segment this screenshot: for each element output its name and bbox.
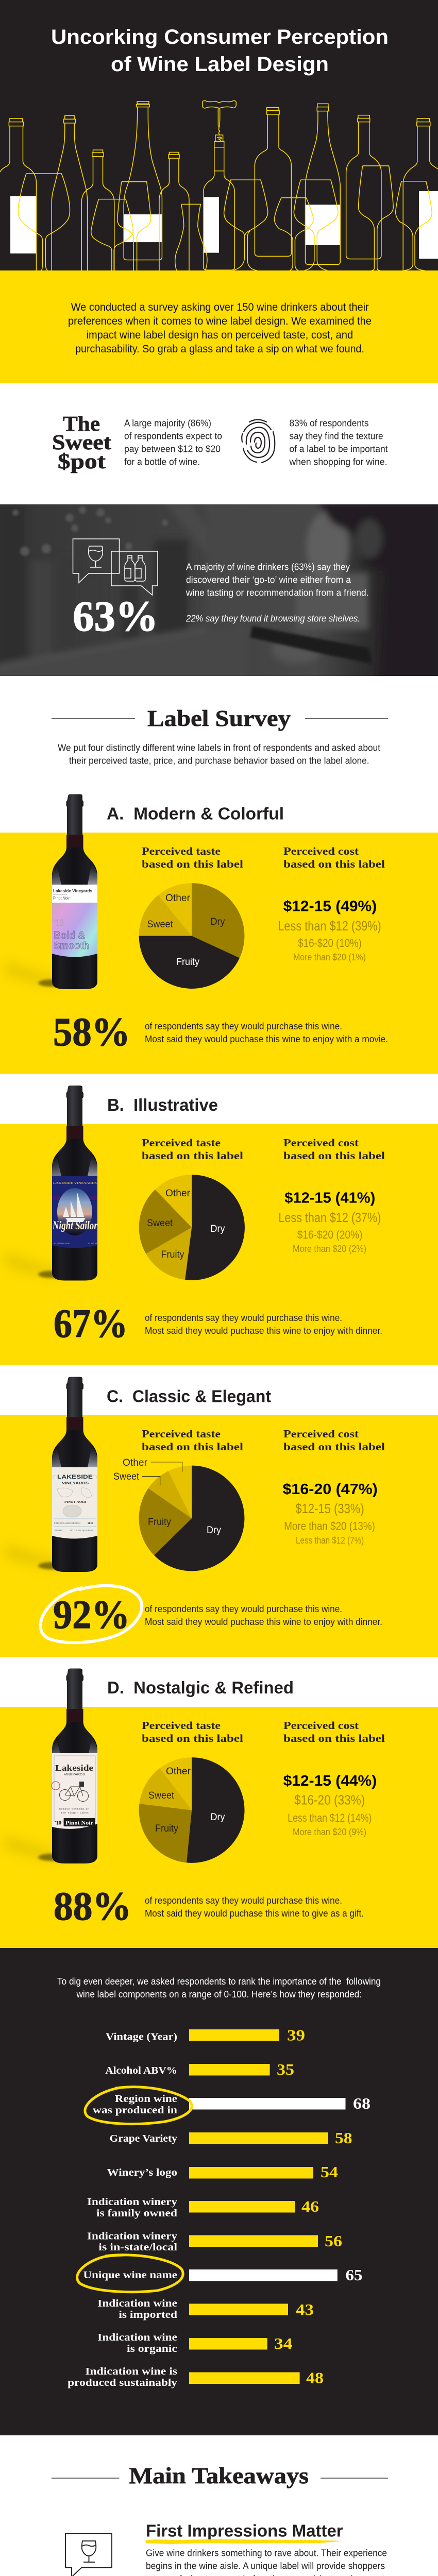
icon: speech bubble with glass — [73, 539, 120, 583]
pie chart: taste B — [139, 1175, 245, 1280]
panel: label D nostalgic and refined — [0, 1668, 438, 1948]
taste heading — [142, 1719, 243, 1744]
panel: photo callout 63% — [0, 502, 438, 685]
text: purchase intent C: Most said they would puchase this wine to enjoy with dinner. — [145, 1616, 382, 1627]
cost heading: Perceived cost — [283, 1428, 359, 1440]
title: of Wine Label Design — [111, 53, 329, 76]
taste heading: based on this label — [142, 1732, 243, 1744]
perceived cost list A: More than $20 (1%) — [293, 952, 366, 962]
bottle A: Bold & — [54, 930, 85, 941]
cost heading: based on this label — [283, 858, 385, 870]
stat: 63%: 63% — [73, 592, 158, 640]
bar: family owned: is family owned — [96, 2208, 177, 2219]
taste heading: based on this label — [142, 858, 243, 870]
text: purchase intent A: Most said they would puchase this wine to enjoy with a movie. — [145, 1033, 388, 1044]
callout: Other leader: Other — [123, 1458, 148, 1468]
bar chart: importance ranking — [68, 2026, 370, 2388]
perceived cost list D: $16-20 (33%) — [294, 1792, 365, 1808]
pie chart: taste B: Other — [165, 1188, 191, 1199]
bar: logo: 54 — [321, 2163, 338, 2181]
panel: label A modern and colorful — [0, 794, 438, 1074]
bar: unique name highlighted — [77, 2255, 362, 2292]
panel: header — [0, 0, 438, 270]
bottle C — [5, 1377, 97, 1572]
pie chart: taste C — [139, 1466, 244, 1571]
bottle D: '10 — [55, 1821, 61, 1826]
intro paragraph — [68, 301, 372, 355]
pie chart: taste B: Fruity — [161, 1249, 184, 1260]
text: survey intro: their perceived taste, price, and purchase behavior based on the label alone. — [69, 755, 369, 766]
pie chart: taste A: Sweet — [147, 919, 173, 930]
text: discovery stat: 22% say they found it browsing store shelves. — [186, 613, 360, 624]
text: purchase intent A: of respondents say they would purchase this wine. — [145, 1021, 342, 1031]
text: purchase intent C — [145, 1603, 382, 1627]
bottle D: Pinot Noir — [65, 1820, 93, 1826]
bottle A: Pinot Noir — [53, 895, 70, 901]
perceived cost list D: More than $20 (9%) — [293, 1826, 366, 1837]
illustration: bottles and glasses line art — [0, 101, 438, 270]
title: Uncorking Consumer Perception — [51, 26, 389, 48]
bar: logo — [107, 2163, 338, 2181]
text: survey intro: We put four distinctly different wine labels in front of respondents and asked about — [58, 742, 380, 753]
bar: organic: is organic — [127, 2343, 177, 2354]
text: label texture — [289, 417, 388, 467]
bar: local — [87, 2231, 342, 2253]
annotation: hand drawn circle around 92% — [40, 1586, 142, 1642]
pie chart: taste D — [139, 1757, 245, 1863]
bar: local: 56 — [325, 2232, 342, 2250]
taste heading — [142, 1137, 243, 1162]
cost heading: based on this label — [283, 1732, 385, 1744]
text: survey intro — [58, 742, 380, 766]
bar: organic — [97, 2332, 292, 2354]
bar: local: is in-state/local — [98, 2242, 178, 2253]
pie chart: taste A — [139, 883, 244, 989]
bar: grape: Grape Variety — [109, 2133, 177, 2144]
pie chart: taste B: Sweet — [147, 1218, 173, 1229]
bar: region highlighted: 68 — [353, 2094, 370, 2112]
intro text — [57, 1976, 381, 1999]
pie chart: taste A: Other — [165, 893, 191, 904]
bottle C: Alc. 13.5% by volume — [70, 1529, 94, 1532]
perceived cost list C — [282, 1481, 378, 1546]
text: price expectation: for a bottle of wine. — [124, 456, 200, 467]
bar: sustainable: 48 — [306, 2369, 324, 2386]
stat: 58%: 58% — [53, 1009, 130, 1054]
pie chart: taste B: Dry — [210, 1224, 225, 1234]
text: purchase intent C: of respondents say they would purchase this wine. — [145, 1603, 342, 1614]
perceived cost list B: $12-15 (41%) — [284, 1190, 375, 1207]
perceived cost list A — [278, 899, 381, 962]
bar: sustainable: Indication wine is — [85, 2366, 177, 2377]
panel: label B illustrative — [0, 1086, 438, 1365]
text: discovery stat: A majority of wine drinkers (63%) say they — [186, 562, 350, 572]
panel: intro — [0, 270, 438, 383]
cost heading: Perceived cost — [283, 1719, 359, 1732]
bottle A: '10 — [54, 918, 64, 929]
bottle C: 2010 — [88, 1522, 94, 1525]
heading: Label Survey: Label Survey — [147, 706, 291, 731]
bar: sustainable: produced sustainably — [68, 2377, 177, 2388]
text: price expectation — [124, 417, 222, 467]
perceived cost list A: $12-15 (49%) — [283, 899, 377, 915]
text: purchase intent B: of respondents say they would purchase this wine. — [145, 1312, 342, 1323]
bottle C: LAKESIDE — [57, 1474, 93, 1480]
pie chart: taste A: Dry — [210, 917, 225, 927]
intro paragraph: preferences when it comes to wine label design. We examined the — [68, 315, 372, 327]
bar: region highlighted: Region wine — [115, 2093, 177, 2105]
stat: 92%: 92% — [53, 1592, 130, 1637]
perceived cost list C: Less than $12 (7%) — [296, 1535, 364, 1546]
perceived cost list C: $12-15 (33%) — [295, 1501, 364, 1516]
icon: speech bubble with glass — [65, 2534, 112, 2576]
panel: label C classic and elegant — [0, 1377, 438, 1657]
bar: vintage: Vintage (Year) — [106, 2031, 177, 2042]
body text: Give wine drinkers something to rave about. Their experience — [146, 2548, 387, 2558]
bottle outlines — [0, 101, 438, 270]
pie chart: taste D: Fruity — [155, 1823, 178, 1834]
text: discovery stat: discovered their ‘go-to’ wine either from a — [186, 574, 351, 585]
bar: family owned: 46 — [301, 2197, 319, 2215]
pie chart: taste D: Dry — [210, 1812, 225, 1823]
intro paragraph: impact wine label design has on perceived taste, cost, and — [87, 329, 353, 341]
heading: First Impressions Matter — [146, 2521, 343, 2540]
text: purchase intent A — [145, 1021, 388, 1044]
text: discovery stat — [186, 562, 369, 624]
heading A: A. Modern & Colorful — [107, 804, 284, 823]
bottle B: 13.5% ALC — [88, 1242, 99, 1245]
bar: alcohol: 35 — [277, 2060, 294, 2078]
text: purchase intent B: Most said they would puchase this wine to enjoy with dinner. — [145, 1325, 382, 1336]
bar: sustainable — [68, 2366, 324, 2388]
text: price expectation: A large majority (86%) — [124, 417, 211, 429]
taste heading: based on this label — [142, 1149, 243, 1162]
body text — [146, 2548, 387, 2576]
bottle C: FINGER LAKES REGION — [54, 1522, 80, 1524]
perceived cost list A: Less than $12 (39%) — [278, 918, 381, 934]
pie chart: taste C: Dry — [207, 1525, 221, 1536]
title — [51, 26, 389, 76]
bottle C: PINOT NOIR — [64, 1500, 86, 1504]
icon: fingerprint — [242, 419, 275, 463]
bottle B: Night Sailor — [52, 1219, 98, 1232]
callout: Sweet leader — [113, 1471, 160, 1485]
heading D: D. Nostalgic & Refined — [107, 1678, 294, 1697]
bottle A: Lakeside Vineyards — [53, 888, 92, 893]
perceived cost list D: Less than $12 (14%) — [288, 1811, 372, 1824]
brush underline — [145, 2539, 344, 2544]
text: label texture: say they find the texture — [290, 431, 383, 441]
heading: The Sweet Spot: Sweet — [52, 430, 111, 454]
panel: sweet spot — [52, 412, 388, 473]
cost heading: based on this label — [283, 1440, 385, 1453]
perceived cost list D — [283, 1773, 377, 1837]
text: price expectation: pay between $12 to $20 — [124, 443, 221, 454]
intro paragraph: We conducted a survey asking over 150 wine drinkers about their — [71, 301, 369, 313]
intro text: wine label components on a range of 0-100. Here’s how they responded: — [76, 1989, 362, 1999]
glass outlines — [18, 166, 432, 270]
pie chart: taste D: Sweet — [148, 1790, 175, 1801]
text: label texture: 83% of respondents — [290, 417, 369, 429]
stat: 88%: 88% — [54, 1884, 131, 1928]
perceived cost list C: $16-20 (47%) — [282, 1481, 378, 1498]
bottle D — [5, 1668, 97, 1863]
heading B: B. Illustrative — [107, 1095, 218, 1114]
cost heading: Perceived cost — [283, 1137, 359, 1149]
text: label texture: when shopping for wine. — [289, 456, 388, 467]
bar: imported: Indication wine — [97, 2298, 177, 2309]
bar: alcohol: Alcohol ABV% — [105, 2065, 177, 2076]
bottle B: LAKESIDE VINEYARDS — [53, 1181, 97, 1185]
perceived cost list B: More than $20 (2%) — [293, 1243, 366, 1254]
heading: The Sweet Spot — [52, 412, 111, 473]
panel: takeaway first impressions — [65, 2521, 387, 2576]
cost heading — [283, 1428, 385, 1453]
taste heading: Perceived taste — [142, 1719, 221, 1732]
bottle A: Smooth — [54, 940, 89, 952]
heading: The Sweet Spot: The — [63, 412, 100, 435]
cost heading — [283, 1137, 385, 1162]
bar: organic: 34 — [274, 2334, 293, 2352]
taste heading — [142, 845, 243, 870]
cost heading — [283, 1719, 385, 1744]
pie chart: taste D: Other — [166, 1766, 191, 1777]
bar: region highlighted — [85, 2087, 370, 2124]
bar: imported: 43 — [296, 2300, 314, 2318]
body text: begins in the wine aisle. A unique label will provide shoppers — [146, 2561, 385, 2571]
callout: Other leader — [123, 1458, 182, 1472]
bottle A — [5, 794, 97, 989]
perceived cost list D: $12-15 (44%) — [283, 1773, 377, 1789]
taste heading: Perceived taste — [142, 1428, 221, 1440]
text: label texture: of a label to be important — [290, 443, 388, 454]
text: purchase intent D: of respondents say they would purchase this wine. — [145, 1895, 342, 1906]
icon: speech bubble with bottles — [111, 551, 158, 595]
bottle B: 2010 Pinot Noir — [54, 1242, 70, 1245]
bottle C: 750 ML — [55, 1529, 63, 1532]
bar: alcohol — [105, 2060, 294, 2078]
bar: region highlighted: was produced in — [93, 2105, 177, 2116]
perceived cost list B: Less than $12 (37%) — [278, 1210, 381, 1225]
heading: The Sweet Spot: $pot — [58, 449, 106, 473]
bottle D: the Finger Lakes — [61, 1811, 89, 1815]
photo background: wine shoppers — [0, 502, 438, 685]
pie chart: taste A: Fruity — [176, 957, 199, 968]
text: purchase intent B — [145, 1312, 382, 1336]
perceived cost list A: $16-$20 (10%) — [298, 937, 362, 950]
bar: unique name highlighted: 65 — [345, 2266, 363, 2284]
pie chart: taste C: Fruity — [148, 1517, 171, 1528]
text: purchase intent D — [145, 1895, 364, 1919]
bar: vintage: 39 — [287, 2026, 305, 2044]
bar: vintage — [106, 2026, 305, 2044]
bottle D: Estate bottled in — [59, 1807, 89, 1810]
perceived cost list B — [278, 1190, 381, 1254]
bar: unique name highlighted: Unique wine name — [83, 2269, 177, 2281]
bottle B — [5, 1086, 99, 1281]
bar: organic: Indication wine — [97, 2332, 177, 2343]
bottle C: VINEYARDS — [62, 1482, 89, 1485]
bottle D: VINEYARDS — [64, 1773, 85, 1776]
bar: grape — [109, 2129, 352, 2147]
cost heading: based on this label — [283, 1149, 385, 1162]
taste heading: Perceived taste — [142, 845, 221, 857]
text: discovery stat: wine tasting or recommendation from a friend. — [186, 587, 369, 598]
bar: family owned: Indication winery — [87, 2196, 177, 2208]
bottle D: Lakeside — [55, 1763, 94, 1773]
callout: Sweet leader: Sweet — [113, 1471, 140, 1482]
bar: imported: is imported — [119, 2309, 177, 2320]
heading: Main Takeaways: Main Takeaways — [129, 2463, 309, 2488]
heading C: C. Classic & Elegant — [107, 1387, 271, 1405]
cost heading: Perceived cost — [283, 845, 359, 857]
bar: logo: Winery’s logo — [107, 2167, 177, 2178]
intro text: To dig even deeper, we asked respondents to rank the importance of the following — [57, 1976, 381, 1987]
bar: local: Indication winery — [87, 2231, 177, 2242]
taste heading — [142, 1428, 243, 1453]
taste heading: based on this label — [142, 1440, 243, 1453]
white bottle labels — [10, 191, 438, 259]
perceived cost list C: More than $20 (13%) — [284, 1520, 375, 1532]
panel: label component ranking — [0, 1948, 438, 2435]
text: purchase intent D: Most said they would puchase this wine to give as a gift. — [145, 1908, 364, 1919]
cost heading — [283, 845, 385, 870]
bar: imported — [97, 2298, 314, 2320]
stat: 67%: 67% — [54, 1301, 128, 1346]
text: price expectation: of respondents expect to — [124, 431, 222, 441]
intro paragraph: purchasability. So grab a glass and take a sip on what we found. — [75, 343, 364, 355]
bar: family owned — [87, 2196, 319, 2219]
bar: grape: 58 — [335, 2129, 352, 2147]
taste heading: Perceived taste — [142, 1137, 221, 1149]
perceived cost list B: $16-$20 (20%) — [297, 1228, 363, 1241]
